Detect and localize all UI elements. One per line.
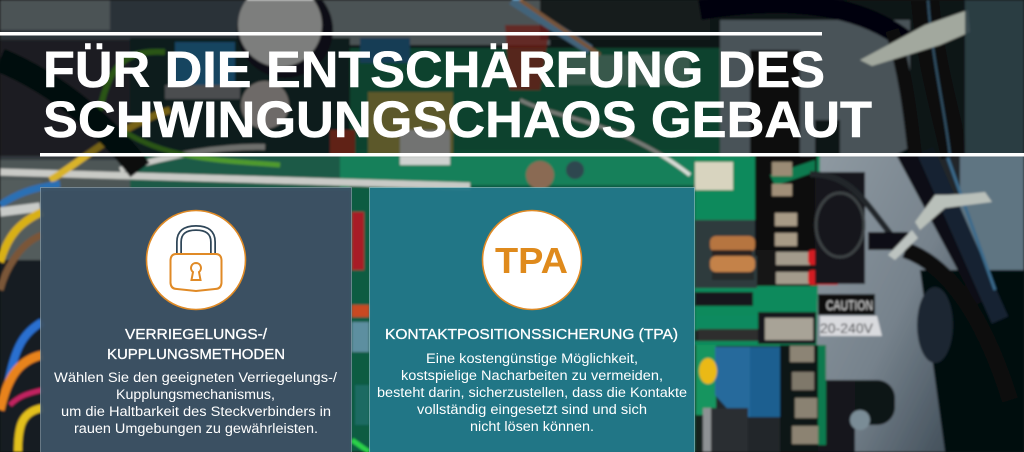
panel: locking / coupling methods bbox=[40, 188, 352, 452]
right board bbox=[695, 156, 820, 346]
body text: TPA: Eine kostengünstige Möglichkeit, bbox=[426, 351, 638, 366]
background photo: circuit board and wires: CAUTION bbox=[826, 297, 873, 313]
heading: TPA: KONTAKTPOSITIONSSICHERUNG (TPA) bbox=[385, 326, 678, 343]
icon: TPA circle: TPA bbox=[495, 240, 568, 281]
title top rule bbox=[0, 32, 822, 36]
upper-right cables over metal bbox=[700, 3, 905, 40]
icon: TPA circle bbox=[482, 210, 582, 310]
metal upper right bbox=[720, 20, 910, 156]
metal sheet bbox=[815, 156, 960, 452]
panel: contact position assurance bbox=[370, 188, 694, 452]
title bottom rule bbox=[40, 153, 1024, 156]
heading: locking methods bbox=[107, 326, 285, 363]
blue block and LED bbox=[696, 345, 716, 415]
coil bbox=[710, 236, 755, 252]
top darkening overlay bbox=[0, 0, 1024, 156]
loop wire bbox=[815, 172, 865, 284]
title: SCHWINGUNGSCHAOS GEBAUT bbox=[43, 91, 872, 148]
icon: padlock in circle bbox=[146, 210, 246, 310]
heading: locking methods: VERRIEGELUNGS-/ bbox=[125, 326, 268, 343]
terminals upper bbox=[755, 156, 817, 256]
body text: locking methods: rauen Umgebungen zu gewährleisten. bbox=[74, 421, 318, 436]
caution label bbox=[818, 294, 875, 315]
body text: locking methods: Kupplungsmechanismus, bbox=[116, 387, 275, 402]
body text: locking methods bbox=[54, 370, 337, 436]
body text: locking methods: um die Haltbarkeit des Steckverbinders in bbox=[61, 404, 331, 419]
capacitors and parts bbox=[237, 0, 333, 78]
body text: TPA bbox=[377, 351, 687, 434]
strip between panels bbox=[352, 212, 364, 270]
title: FÜR DIE ENTSCHÄRFUNG DES bbox=[43, 41, 825, 98]
body text: TPA: kostspielige Nacharbeiten zu vermeiden, bbox=[401, 368, 663, 383]
body text: TPA: nicht lösen können. bbox=[470, 419, 594, 434]
cable ties lower bbox=[915, 192, 992, 230]
body text: locking methods: Wählen Sie den geeigneten Verriegelungs-/ bbox=[54, 370, 337, 385]
background photo: circuit board and wires: 20-240V bbox=[820, 320, 874, 336]
title bbox=[43, 41, 872, 148]
cables bbox=[905, 150, 985, 300]
red connectors bbox=[808, 250, 838, 265]
body text: TPA: vollständig eingesetzt sind und sich bbox=[417, 402, 647, 417]
terminal block lower bbox=[758, 312, 816, 344]
heading: locking methods: KUPPLUNGSMETHODEN bbox=[107, 346, 285, 363]
body text: TPA: besteht darin, sicherzustellen, dass die Kontakte bbox=[377, 385, 687, 400]
wires bbox=[0, 172, 470, 186]
